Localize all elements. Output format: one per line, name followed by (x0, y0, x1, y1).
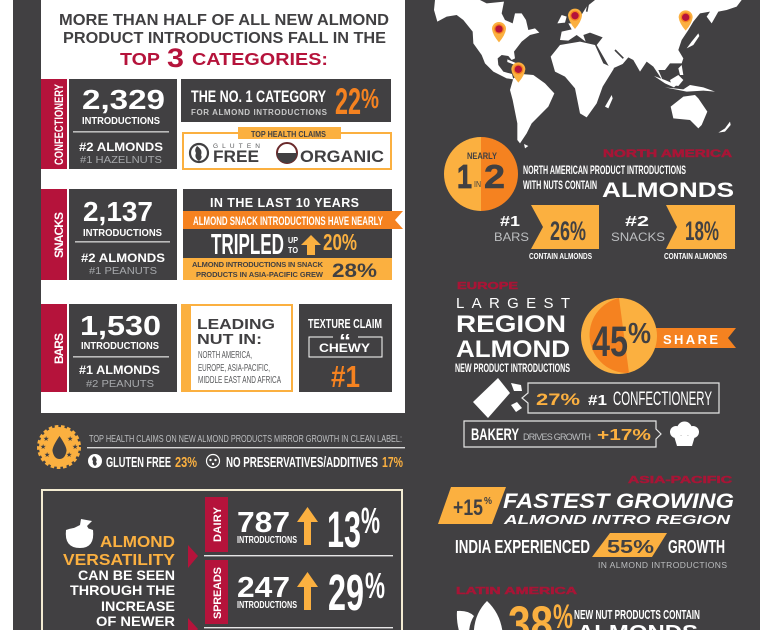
europe section: REGION (456, 311, 566, 338)
bars stats: INTRODUCTIONS (81, 340, 159, 352)
callout: leading nut: NORTH AMERICA, (198, 350, 252, 361)
asia-pacific section: +15 (453, 495, 483, 520)
callout: confectionery: CONFECTIONERY (613, 389, 712, 410)
icon: chocolate bar (473, 378, 522, 418)
icon: 45 percent circle (581, 298, 657, 374)
text: versatility copy: OF NEWER (96, 613, 175, 629)
callout: bakery: BAKERY (471, 425, 519, 444)
north america section: CONTAIN ALMONDS (664, 251, 727, 261)
callout: leading nut: NUT IN: (197, 331, 262, 348)
health claims strip: NO PRESERVATIVES/ADDITIVES (226, 454, 378, 471)
text: versatility copy: CAN BE SEEN (78, 567, 175, 583)
text: versatility copy: INCREASE (101, 598, 175, 614)
asia-pacific section: 55% (607, 537, 654, 557)
snacks stats: INTRODUCTIONS (83, 227, 162, 239)
snacks stats: 2,137 (83, 196, 153, 227)
asia-pacific section: FASTEST GROWING (503, 490, 734, 513)
callout: bakery (464, 421, 661, 447)
icon: almond badge: ★ (44, 451, 50, 459)
heading: top 3 categories: 3 (167, 43, 184, 73)
top health claims box: TOP HEALTH CLAIMS (251, 130, 327, 139)
callout: leading nut: EUROPE, ASIA-PACIFIC, (198, 363, 270, 374)
callout: snacks tripled: UP (288, 235, 298, 245)
callout: snacks tripled: TRIPLED (211, 229, 284, 261)
icon: almond badge: ★ (72, 443, 78, 451)
north america section: ALMONDS (602, 179, 734, 202)
callout: leading nut: LEADING (197, 316, 275, 333)
spreads row: INTRODUCTIONS (237, 600, 297, 611)
panel: almond versatility (42, 490, 402, 630)
callout: bakery: DRIVES GROWTH (523, 432, 591, 442)
callout: leading nut (181, 304, 292, 392)
europe section: LARGEST (456, 295, 570, 312)
icon: almond badge (39, 427, 79, 467)
north america section: #2 (625, 213, 649, 230)
callout: texture claim: CHEWY (319, 341, 370, 355)
callout: number 1 category: FOR ALMOND INTRODUCTIONS (191, 108, 328, 117)
bars stats: #2 PEANUTS (86, 379, 154, 390)
ribbon: share: SHARE (663, 332, 718, 347)
spreads row: 29 (328, 564, 364, 621)
spreads row (205, 560, 385, 624)
spreads row: % (365, 565, 385, 606)
panel: top 3 categories (41, 0, 405, 413)
health claims strip: TOP HEALTH CLAIMS ON NEW ALMOND PRODUCTS MIRROR GROWTH IN CLEAN LABEL: (89, 433, 402, 445)
arrow: up (301, 235, 321, 255)
health claims strip: 17% (382, 454, 403, 471)
icon: 1 in 2 circle: 2 (484, 158, 505, 195)
top health claims box: FREE (213, 147, 259, 166)
icon: 1 in 2 circle: IN (474, 180, 481, 189)
callout: number 1 category (181, 79, 391, 122)
callout: snacks tripled: 20% (323, 229, 357, 255)
heading: top 3 categories (59, 12, 389, 73)
callout: number 1 category: % (361, 83, 379, 114)
europe section: ALMOND (456, 336, 570, 363)
callout: snacks tripled: ALMOND INTRODUCTIONS IN SNACK (192, 260, 324, 269)
north america section: SNACKS (611, 230, 665, 244)
dairy row (205, 497, 380, 558)
confectionery stats: CONFECTIONERY (52, 84, 66, 165)
icon: almonds (457, 601, 503, 630)
north america section: #1 (500, 213, 520, 230)
icon: location pins (492, 9, 693, 83)
top health claims box: ORGANIC (300, 147, 384, 166)
icon: muffin (670, 422, 699, 446)
asia-pacific section: ALMOND INTRO REGION (503, 512, 731, 527)
heading: top 3 categories: CATEGORIES: (192, 49, 328, 69)
snacks stats: #1 PEANUTS (89, 266, 157, 277)
asia-pacific section: % (484, 496, 492, 507)
dairy row: % (361, 500, 380, 541)
dairy row: 787 (237, 507, 290, 539)
callout: texture claim: “ (339, 331, 351, 351)
bars stats: 1,530 (80, 310, 161, 341)
icon: almond badge: ★ (40, 443, 46, 451)
north america section: NORTH AMERICA (603, 148, 732, 160)
confectionery stats: 2,329 (82, 84, 165, 115)
icon: 1 in 2 circle (444, 137, 518, 211)
heading: top 3 categories: MORE THAN HALF OF ALL NEW ALMOND (59, 12, 389, 29)
world map (434, 0, 742, 148)
dairy row: INTRODUCTIONS (237, 535, 297, 546)
text: versatility copy: ALMOND (100, 534, 175, 551)
spreads row: SPREADS (212, 567, 224, 619)
callout: confectionery: #1 (588, 392, 607, 409)
snacks stats (41, 189, 177, 280)
asia-pacific section: INDIA EXPERIENCED (455, 537, 590, 557)
confectionery stats (41, 79, 177, 169)
europe section: NEW PRODUCT INTRODUCTIONS (455, 363, 570, 375)
north america section (444, 137, 735, 261)
icon: bowl (66, 519, 93, 548)
dairy row: 13 (327, 501, 361, 558)
north america section: CONTAIN ALMONDS (529, 251, 592, 261)
text: versatility copy: VERSATILITY (63, 552, 176, 569)
callout: snacks tripled: ALMOND SNACK INTRODUCTIONS HAVE NEARLY (193, 216, 383, 228)
callout: snacks tripled: 28% (332, 261, 377, 282)
bars stats: #1 ALMONDS (79, 363, 160, 377)
callout: texture claim: #1 (331, 359, 360, 394)
icon: almond badge: ★ (43, 435, 49, 443)
north america section: 18% (685, 216, 719, 246)
callout: texture claim: TEXTURE CLAIM (308, 316, 382, 331)
health claims strip: 23% (175, 454, 197, 471)
ribbon: share (650, 328, 736, 348)
heading: top 3 categories: TOP (120, 49, 160, 69)
snacks stats: SNACKS (52, 212, 66, 258)
arrow: dairy pointer (188, 545, 198, 568)
north america section: BARS (494, 230, 529, 244)
asia-pacific section: IN ALMOND INTRODUCTIONS (598, 560, 727, 570)
latin america section (456, 585, 700, 630)
icon: almond badge: ★ (66, 451, 72, 459)
spreads row: 247 (237, 572, 290, 604)
health claims strip: GLUTEN FREE (106, 454, 171, 471)
europe section: EUROPE (457, 280, 518, 292)
callout: snacks tripled: PRODUCTS IN ASIA-PACIFIC GREW (196, 270, 324, 279)
europe section (455, 280, 736, 447)
confectionery stats: #2 ALMONDS (79, 140, 163, 154)
icon: 45 percent circle: % (628, 318, 651, 350)
callout: snacks tripled (183, 189, 403, 282)
icon: organic (277, 143, 297, 163)
callout: confectionery (522, 383, 719, 413)
health claims strip (39, 427, 405, 471)
latin america section: NEW NUT PRODUCTS CONTAIN (574, 608, 700, 622)
heading: top 3 categories: PRODUCT INTRODUCTIONS FALL IN THE (63, 30, 386, 47)
icon: 1 in 2 circle: NEARLY (467, 151, 498, 162)
asia-pacific section: GROWTH (668, 537, 725, 557)
asia-pacific section: ASIA-PACIFIC (628, 474, 733, 486)
dairy row: DAIRY (212, 506, 224, 542)
snacks stats: #2 ALMONDS (81, 251, 165, 265)
top health claims box: GLUTEN (213, 143, 260, 150)
callout: bakery: +17% (597, 427, 651, 444)
text: versatility copy: THROUGH THE (70, 582, 175, 598)
callout: texture claim (299, 304, 392, 394)
callout: confectionery: 27% (536, 390, 580, 409)
confectionery stats: #1 HAZELNUTS (80, 155, 162, 166)
callout: leading nut: MIDDLE EAST AND AFRICA (198, 375, 281, 386)
north america section: WITH NUTS CONTAIN (523, 180, 597, 192)
north america section: 26% (550, 216, 586, 246)
icon: almond badge: ★ (67, 435, 73, 443)
icon: 1 in 2 circle: 1 (457, 158, 472, 195)
text: versatility copy (63, 534, 176, 629)
icon: gluten free (190, 144, 208, 162)
callout: number 1 category: 22 (335, 81, 361, 122)
callout: snacks tripled: IN THE LAST 10 YEARS (210, 196, 359, 210)
arrow: spreads pointer (188, 618, 198, 630)
icon: 45 percent circle: 45 (592, 318, 628, 366)
bars stats: BARS (52, 333, 66, 364)
bars stats (41, 304, 177, 392)
asia-pacific section (438, 474, 734, 570)
confectionery stats: INTRODUCTIONS (82, 115, 160, 127)
callout: number 1 category: THE NO. 1 CATEGORY (191, 87, 326, 106)
latin america section: LATIN AMERICA (456, 585, 578, 597)
callout: snacks tripled: TO (288, 245, 298, 255)
top health claims box (183, 127, 391, 169)
